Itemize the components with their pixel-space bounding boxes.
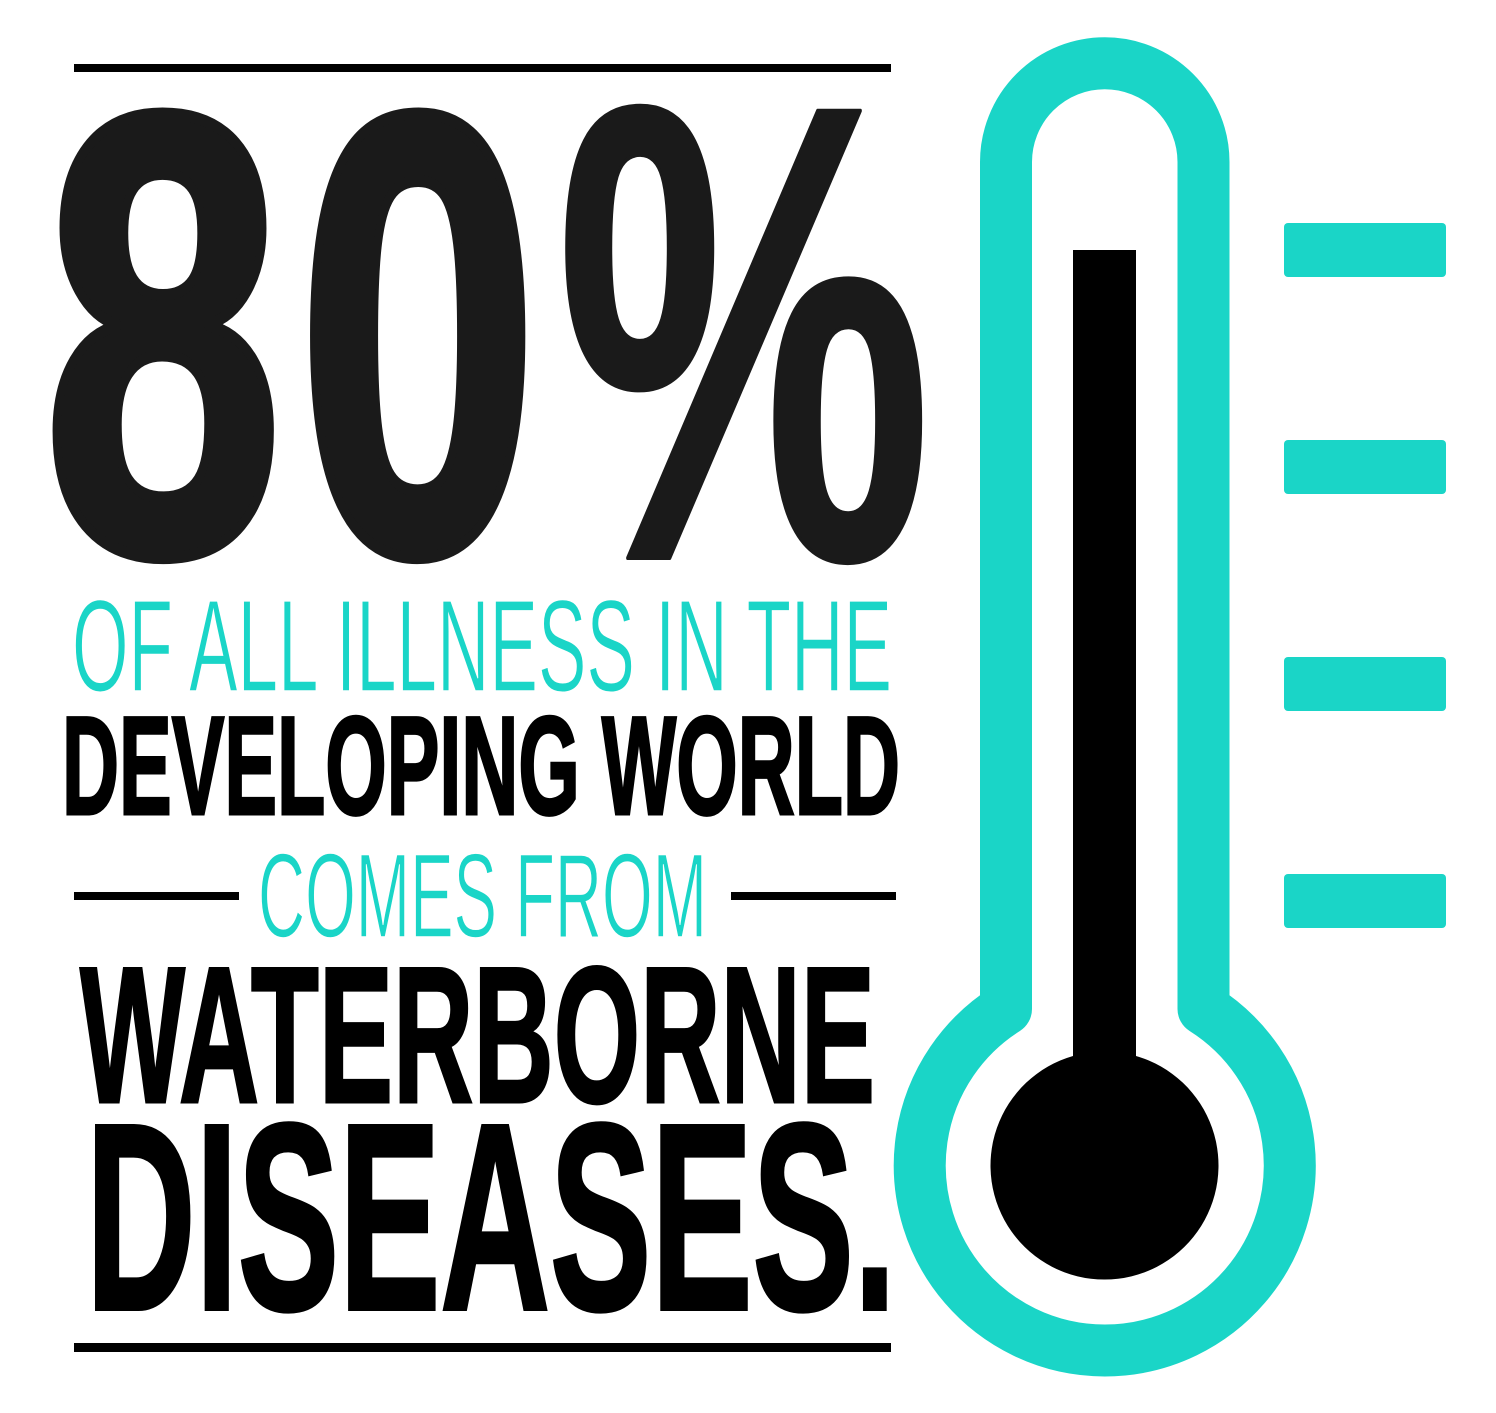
headline statistic: 80%: 0 (297, 0, 539, 686)
bottom rule (74, 1343, 891, 1352)
temperature tick marks (1284, 223, 1446, 928)
icon: thermometer (920, 63, 1290, 1350)
comes from line with side rules (74, 829, 896, 963)
headline statistic: 80% (43, 0, 932, 696)
top rule (74, 64, 891, 72)
text line: diseases: DISEASES. (86, 1069, 896, 1366)
headline statistic: 80%: 8 (43, 0, 283, 686)
text line: waterborne: WATERBORNE (80, 927, 875, 1144)
comes from line with side rules: COMES FROM (258, 829, 707, 963)
thermometer mercury (990, 250, 1218, 1280)
thermometer outline (920, 63, 1290, 1350)
